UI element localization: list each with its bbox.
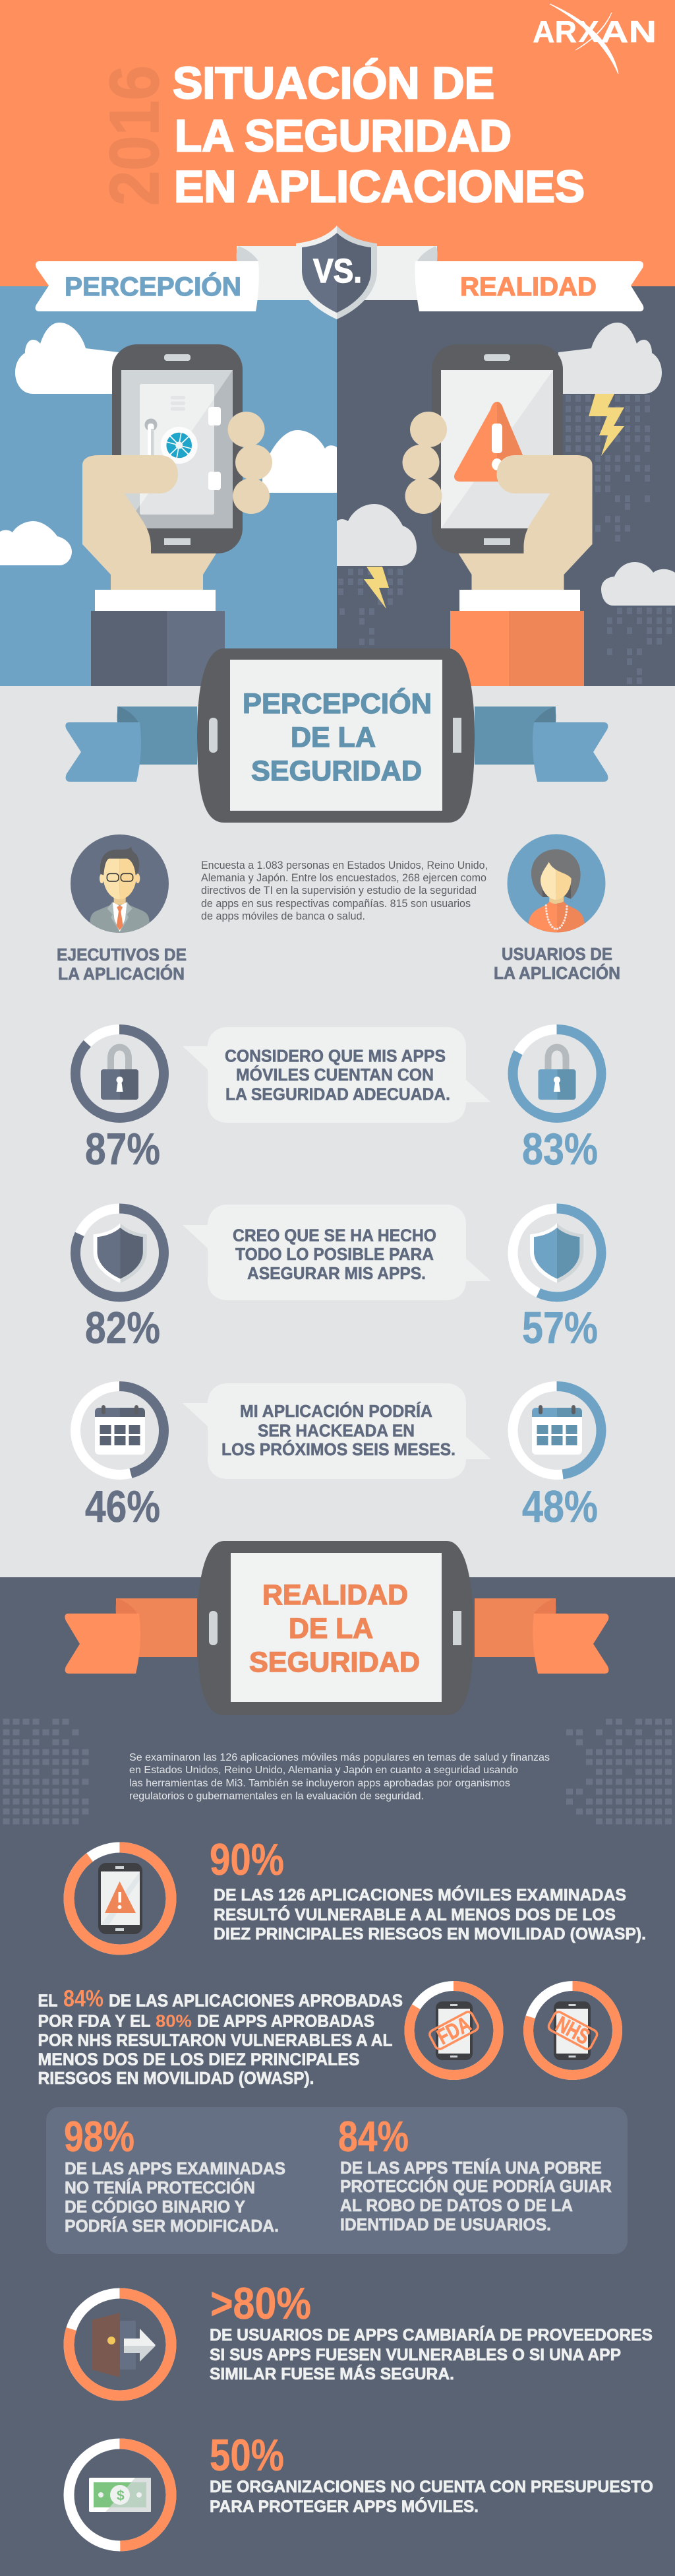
- phone banner: reality: [197, 1541, 473, 1715]
- study description: las herramientas de Mi3. También se incluyeron apps aprobadas por organismos: [129, 1778, 510, 1789]
- row 2: speech bubble: [183, 1205, 491, 1300]
- row 3: left value: 46%: [85, 1482, 160, 1532]
- hero: right hand: [402, 412, 592, 590]
- avatar: executive: [71, 834, 169, 935]
- survey description: directivos de TI en la supervisión y estudio de la seguridad: [201, 884, 477, 896]
- ribbon: reality section: [65, 1598, 608, 1674]
- stat >80%: SIMILAR FUESE MÁS SEGURA.: [210, 2364, 454, 2383]
- ring 84% with FDA phone: [409, 1986, 498, 2075]
- stat FDA and NHS text: DE APPS APROBADAS: [197, 2011, 374, 2030]
- ribbon: perception section: [65, 707, 608, 782]
- row 3: right ring 48% with calendar: [513, 1387, 601, 1475]
- stat 50%: DE ORGANIZACIONES NO CUENTA CON PRESUPUESTO: [210, 2478, 653, 2496]
- logo: Arxan: AN: [601, 15, 657, 49]
- ring 84% with FDA phone: FDA: [433, 2011, 475, 2049]
- hero: left hand: [82, 412, 272, 590]
- stat 84%: DE LAS APPS TENÍA UNA POBRE: [340, 2158, 602, 2178]
- stat 84%: 84%: [338, 2112, 409, 2160]
- hero: storm clouds: [337, 323, 675, 606]
- survey description: [201, 859, 488, 922]
- stat 90%: [210, 1835, 646, 1943]
- row 1: left ring 87% with lock: [75, 1029, 163, 1117]
- row 2: right ring 57% with shield: [513, 1209, 601, 1297]
- stat >80%: [210, 2278, 653, 2383]
- row 1: speech bubble: [183, 1027, 491, 1123]
- stat FDA and NHS text: POR NHS RESULTARON VULNERABLES A AL: [38, 2030, 393, 2050]
- ring 50% with money icon: $: [117, 2488, 125, 2503]
- perception sky background: [0, 286, 337, 686]
- stat >80%: SI SUS APPS FUESEN VULNERABLES O SI UNA APP: [210, 2346, 621, 2364]
- hero: lightning bolts: [364, 394, 624, 609]
- row 2: speech bubble: TODO LO POSIBLE PARA: [235, 1244, 434, 1264]
- stat 98%: PODRÍA SER MODIFICADA.: [65, 2216, 279, 2236]
- heading: reality: [249, 1579, 420, 1678]
- study description: en Estados Unidos, Reino Unido, Alemania y Japón en cuanto a seguridad usando: [129, 1765, 518, 1776]
- stat 90%: DE LAS 126 APLICACIONES MÓVILES EXAMINADAS: [214, 1885, 626, 1904]
- title: LA SEGURIDAD: [175, 111, 512, 161]
- row 2: speech bubble: CREO QUE SE HA HECHO: [233, 1226, 436, 1245]
- perception section background: [0, 686, 675, 1577]
- row 3: left ring 46% with calendar: [75, 1387, 163, 1475]
- label: executives: LA APLICACIÓN: [58, 964, 185, 984]
- avatar: user: [508, 834, 605, 935]
- ribbon: versus banner: [36, 246, 643, 311]
- stat 50%: PARA PROTEGER APPS MÓVILES.: [210, 2496, 479, 2516]
- ring >80% with door icon: [69, 2293, 171, 2396]
- header background: [0, 0, 675, 286]
- stat FDA and NHS text: [38, 1986, 403, 2088]
- logo: Arxan: X: [578, 15, 599, 49]
- stat 98%: NO TENÍA PROTECCIÓN: [65, 2178, 255, 2197]
- panel: 98% and 84%: [46, 2107, 628, 2254]
- row 2: left ring 82% with shield: [75, 1209, 163, 1297]
- stat 98%: [64, 2112, 285, 2236]
- row 2: right value: 57%: [522, 1303, 598, 1353]
- stat 84%: IDENTIDAD DE USUARIOS.: [340, 2215, 551, 2234]
- reality storm background: [337, 286, 675, 686]
- heading: perception: SEGURIDAD: [251, 755, 422, 787]
- ring 80% with NHS phone: NHS: [552, 2011, 594, 2049]
- label: users: LA APLICACIÓN: [494, 963, 620, 983]
- world map dots: right: [566, 1722, 672, 1821]
- ring 90% with phone warning icon: [69, 1847, 171, 1950]
- stat 98%: DE CÓDIGO BINARIO Y: [65, 2197, 245, 2216]
- row 1: left value: 87%: [85, 1124, 160, 1174]
- heading: reality: SEGURIDAD: [249, 1647, 420, 1678]
- label: executives: EJECUTIVOS DE: [57, 945, 187, 964]
- stat 50%: [210, 2430, 653, 2516]
- stat 90%: RESULTÓ VULNERABLE A AL MENOS DOS DE LOS: [214, 1904, 616, 1924]
- row 3: speech bubble: LOS PRÓXIMOS SEIS MESES.: [221, 1439, 455, 1459]
- label: executives: [57, 945, 187, 984]
- ribbon label: percepción: [36, 261, 259, 311]
- shield: versus: VS.: [313, 252, 362, 290]
- stat 84%: PROTECCIÓN QUE PODRÍA GUIAR: [340, 2176, 612, 2196]
- stat FDA and NHS text: 80%: [156, 2011, 192, 2030]
- hero: left phone with vault: [112, 344, 243, 553]
- hero: clouds, perception side: [0, 323, 337, 565]
- row 3: speech bubble: SER HACKEADA EN: [258, 1421, 415, 1441]
- shield: versus: [296, 226, 377, 319]
- study description: Se examinaron las 126 aplicaciones móviles más populares en temas de salud y finanzas: [129, 1752, 550, 1763]
- row 1: speech bubble: MÓVILES CUENTAN CON: [236, 1065, 434, 1084]
- stat FDA and NHS text: DE LAS APLICACIONES APROBADAS: [109, 1991, 403, 2011]
- reality section background: [0, 1577, 675, 2576]
- heading: perception: [243, 687, 432, 787]
- logo: Arxan: [533, 4, 657, 74]
- heading: reality: REALIDAD: [262, 1579, 408, 1611]
- stat >80%: DE USUARIOS DE APPS CAMBIARÍA DE PROVEEDORES: [210, 2325, 653, 2344]
- title: [173, 58, 585, 212]
- label: users: [494, 944, 620, 983]
- row 3: speech bubble: [183, 1383, 491, 1479]
- phone banner: perception: [197, 648, 475, 823]
- stat 98%: DE LAS APPS EXAMINADAS: [65, 2158, 285, 2178]
- stat 50%: 50%: [210, 2430, 284, 2480]
- stat FDA and NHS text: MENOS DOS DE LOS DIEZ PRINCIPALES: [38, 2049, 360, 2069]
- heading: perception: PERCEPCIÓN: [243, 687, 432, 720]
- study description: regulatorios o gubernamentales en la evaluación de seguridad.: [129, 1790, 424, 1802]
- heading: perception: DE LA: [291, 722, 376, 753]
- stat FDA and NHS text: 84%: [63, 1986, 103, 2012]
- ribbon label: percepción: PERCEPCIÓN: [65, 271, 241, 301]
- heading: reality: DE LA: [289, 1613, 373, 1645]
- survey description: Alemania y Japón. Entre los encuestados, 268 ejercen como: [201, 871, 486, 884]
- stat FDA and NHS text: EL: [38, 1991, 58, 2011]
- survey description: Encuesta a 1.083 personas en Estados Unidos, Reino Unido,: [201, 859, 488, 871]
- row 2: left value: 82%: [85, 1303, 160, 1353]
- stat 84%: AL ROBO DE DATOS O DE LA: [340, 2195, 573, 2215]
- stat 84%: [338, 2112, 612, 2234]
- ring 80% with NHS phone: [529, 1986, 617, 2075]
- stat 90%: 90%: [210, 1835, 284, 1885]
- hero: right phone with warning: [432, 344, 563, 553]
- row 1: speech bubble: LA SEGURIDAD ADECUADA.: [225, 1084, 450, 1104]
- ring 50% with money icon: [69, 2443, 171, 2546]
- stat >80%: >80%: [210, 2278, 311, 2329]
- logo: Arxan: AR: [533, 15, 577, 49]
- hero: left cuff and sleeve: [91, 590, 225, 686]
- world map dots: left: [3, 1722, 88, 1821]
- hero: right cuff and sleeve: [450, 590, 584, 686]
- row 1: right value: 83%: [522, 1124, 598, 1174]
- row 3: speech bubble: MI APLICACIÓN PODRÍA: [240, 1401, 432, 1421]
- stat 98%: 98%: [64, 2112, 134, 2160]
- ribbon label: realidad: [415, 261, 643, 311]
- ribbon label: realidad: REALIDAD: [460, 272, 597, 301]
- row 2: speech bubble: ASEGURAR MIS APPS.: [247, 1263, 426, 1283]
- year 2016 rotated: 2016: [96, 65, 173, 206]
- row 1: right ring 83% with lock: [513, 1029, 601, 1117]
- hero: city silhouettes, reality side: [338, 398, 672, 681]
- study description: [129, 1752, 550, 1802]
- row 3: right value: 48%: [522, 1482, 598, 1532]
- stat FDA and NHS text: POR FDA Y EL: [38, 2011, 151, 2030]
- title: SITUACIÓN DE: [173, 58, 494, 108]
- title: EN APLICACIONES: [174, 162, 585, 212]
- survey description: de apps en sus respectivas compañías. 815 son usuarios: [201, 897, 471, 910]
- label: users: USUARIOS DE: [502, 944, 612, 964]
- survey description: de apps móviles de banca o salud.: [201, 910, 365, 922]
- stat 90%: DIEZ PRINCIPALES RIESGOS EN MOVILIDAD (OWASP).: [214, 1925, 646, 1943]
- stat FDA and NHS text: RIESGOS EN MOVILIDAD (OWASP).: [38, 2068, 314, 2088]
- row 1: speech bubble: CONSIDERO QUE MIS APPS: [225, 1046, 446, 1066]
